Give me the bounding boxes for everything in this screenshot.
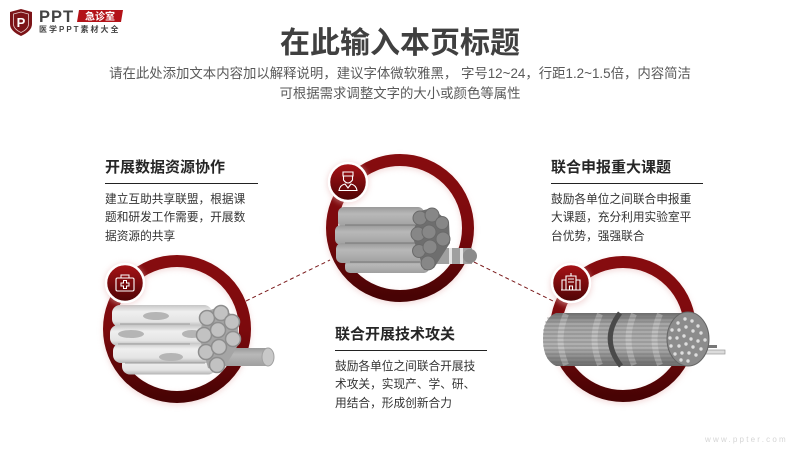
body: center [335,360,475,410]
divider: center [335,350,487,351]
text block: center [335,326,487,410]
connector: left to center dashed line [246,260,330,301]
body: right: 大课题，充分利用实验室平 [551,211,691,224]
subtitle: 请在此处添加文本内容加以解释说明，建议字体微软雅黑， 字号12~24，行距1.2~1.5倍，内容简洁 [109,66,691,81]
body: left: 题和研发工作需要，开展数 [105,211,245,224]
text block: right [551,159,703,243]
body: right: 台优势，强强联合 [551,230,645,243]
body: left [105,192,245,243]
body: right: 鼓励各单位之间联合申报重 [551,193,691,206]
icon: hospital building badge [550,264,592,306]
body: center: 用结合，形成创新合力 [335,397,452,410]
body: center: 鼓励各单位之间联合开展技 [335,360,475,373]
logo: PPT [39,8,74,26]
center ring with cable bundle [332,160,477,298]
title: 在此输入本页标题 [280,27,520,60]
icon: medical kit badge [104,263,146,305]
subtitle: 可根据需求调整文字的大小或颜色等属性 [279,86,521,101]
divider: left [105,183,258,184]
left ring with cable bundle [109,261,274,399]
logo: P [17,15,26,30]
connector: center to right dashed line [474,262,553,301]
right ring with striped cable [543,262,725,398]
logo: 医学PPT素材大全 [39,24,121,34]
divider: right [551,183,703,184]
heading: center: 联合开展技术攻关 [335,326,455,343]
heading: left: 开展数据资源协作 [105,159,225,176]
body: center: 术攻关，实现产、学、研、 [335,378,475,391]
heading: right: 联合申报重大课题 [551,159,671,176]
icon: doctor badge [327,162,369,204]
body: left: 建立互助共享联盟，根据课 [105,193,245,206]
watermark: www.ppter.com [705,435,788,444]
logo [10,8,123,36]
logo: 急诊室 [85,10,115,23]
body: right [551,192,691,243]
text block: left [105,159,258,243]
subtitle [109,66,691,101]
body: left: 据资源的共享 [105,230,175,243]
